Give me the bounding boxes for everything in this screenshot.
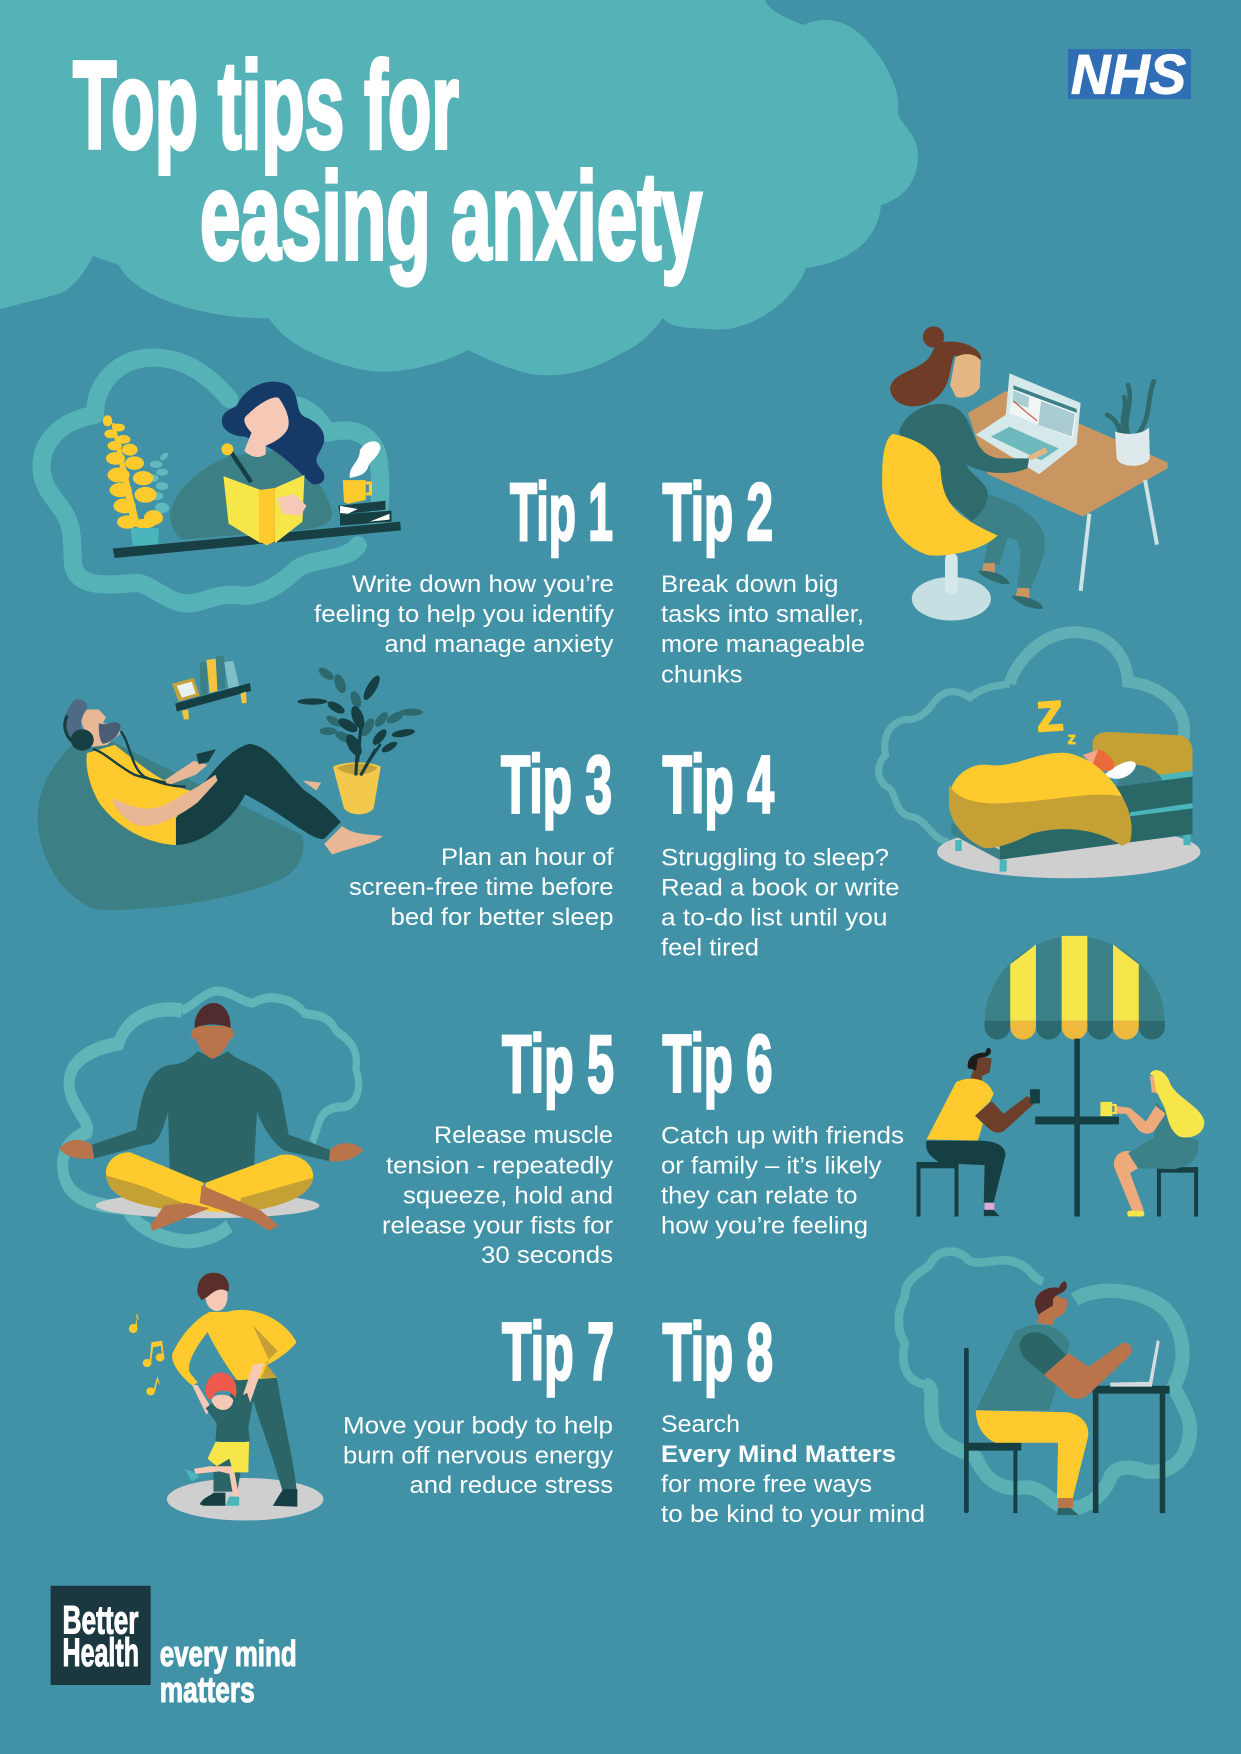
blanket: [949, 753, 1132, 848]
tip 3: screen-free time before: [349, 874, 614, 901]
header cloud: [0, 0, 918, 375]
dad head: [197, 1273, 229, 1311]
dad shirt: [172, 1310, 297, 1385]
tip 4: [661, 740, 900, 962]
illustration: meditation and dancing: [51, 991, 363, 1685]
desk: [968, 391, 1168, 517]
tip 8: Every Mind Matters: [661, 1441, 896, 1468]
pen: [231, 452, 251, 482]
headphones and cable: [65, 715, 214, 787]
dance floor shadow: [167, 1478, 323, 1520]
tip 8: for more free ways: [661, 1471, 872, 1498]
man trousers: [976, 1410, 1088, 1498]
illustration: woman at laptop and sleeping person: [879, 326, 1200, 878]
sleeping Z letters: Z: [1036, 693, 1064, 740]
tip 6: [661, 1018, 904, 1240]
body: [170, 450, 332, 539]
laptop: [976, 373, 1081, 474]
woman hair: [890, 326, 982, 406]
woman right: [1100, 1070, 1204, 1217]
plant pot: [130, 528, 159, 545]
thought cloud outline: [42, 358, 380, 603]
Better Health logo box: [51, 1586, 151, 1685]
tip 1: and manage anxiety: [384, 631, 614, 658]
tip 3: Tip 3: [501, 740, 612, 830]
potted plant: [297, 665, 423, 814]
crossed legs: [106, 1152, 313, 1213]
meditation cloud outline: [63, 991, 359, 1241]
dad trousers and shoes: [200, 1378, 297, 1507]
tip 8: to be kind to your mind: [661, 1501, 925, 1528]
shelf: [113, 522, 401, 558]
beard and hair: [64, 699, 121, 744]
tip 5: tension - repeatedly: [386, 1152, 614, 1180]
Better Health logo text: Health: [62, 1631, 139, 1675]
tip 6: Catch up with friends: [661, 1122, 904, 1150]
sleeping Z letters: [1036, 693, 1076, 748]
man sleeve: [1019, 1332, 1066, 1375]
woman face: [950, 354, 981, 398]
chair base: [912, 553, 991, 621]
tip 5: release your fists for: [382, 1212, 613, 1240]
tip 4: Struggling to sleep?: [661, 844, 889, 872]
desk plant: [1107, 381, 1154, 466]
face: [244, 397, 289, 457]
sleep cloud outline: [879, 632, 1184, 842]
tip 6: Tip 6: [662, 1018, 772, 1110]
tip 3: bed for better sleep: [390, 904, 614, 931]
tip 7: [343, 1306, 614, 1499]
tip 3: Plan an hour of: [441, 844, 614, 871]
tip 1: [314, 467, 615, 658]
tip 8: Search: [661, 1411, 740, 1438]
tip 2: Tip 2: [662, 467, 773, 558]
bed floor shadow: [937, 825, 1200, 878]
tip 2: chunks: [661, 662, 742, 688]
back plant: [146, 451, 170, 513]
illustration: friends at cafe table and man with laptop: [899, 936, 1204, 1515]
tip 6: how you’re feeling: [661, 1212, 868, 1240]
tip 7: and reduce stress: [410, 1472, 613, 1499]
tip 1: Write down how you’re: [352, 571, 614, 598]
tip 7: Tip 7: [502, 1306, 614, 1398]
tip 2: more manageable: [661, 631, 865, 658]
head: [191, 1003, 234, 1059]
tip 4: Tip 4: [662, 740, 774, 830]
title: Top tips for: [73, 37, 459, 175]
wall shelf with books: [172, 655, 251, 719]
tip 2: [661, 467, 865, 688]
tip 5: [382, 1019, 614, 1269]
every mind matters logo text: matters: [160, 1669, 255, 1710]
table: [1035, 1039, 1119, 1217]
title: easing anxiety: [200, 148, 702, 286]
Better Health logo text: Better: [62, 1598, 138, 1642]
tip 5: Release muscle: [434, 1122, 613, 1149]
man head: [1035, 1281, 1067, 1325]
man skin: [81, 709, 383, 855]
umbrella: [985, 936, 1165, 1040]
yellow plant: [103, 415, 163, 529]
tip 3: [349, 740, 614, 931]
chair seat: [882, 434, 998, 556]
tip 6: or family – it’s likely: [661, 1152, 882, 1180]
tip 8: [661, 1307, 925, 1528]
illustration: woman writing in journal: [38, 358, 423, 910]
feet: [978, 563, 1043, 609]
tip 1: Tip 1: [510, 467, 613, 558]
tip 5: 30 seconds: [481, 1242, 613, 1269]
tip 4: a to-do list until you: [661, 904, 888, 932]
tip 4: Read a book or write: [661, 874, 900, 902]
every mind matters logo text: [160, 1633, 297, 1710]
tip 2: Break down big: [661, 571, 838, 598]
tip 5: Tip 5: [502, 1019, 614, 1110]
trousers: [968, 494, 1045, 589]
man shirt: [86, 745, 190, 845]
feet: [150, 1185, 279, 1231]
desk and laptop: [1093, 1340, 1170, 1513]
tip 7: burn off nervous energy: [343, 1442, 614, 1470]
open book: [223, 475, 306, 545]
jumper: [899, 404, 1029, 522]
torso: [92, 1051, 330, 1183]
man on beanbag: beanbag: [38, 731, 303, 910]
every mind matters logo text: every mind: [160, 1633, 297, 1674]
music notes: [129, 1313, 164, 1395]
tip 8: Tip 8: [662, 1307, 773, 1398]
stools: [917, 1162, 1198, 1217]
tip 4: feel tired: [661, 934, 759, 962]
man foot: [1057, 1498, 1079, 1515]
chair: [964, 1348, 1021, 1513]
sleeping Z letters: z: [1068, 729, 1076, 748]
hand: [1027, 447, 1048, 460]
man trousers: [176, 744, 341, 845]
man left: [926, 1048, 1040, 1216]
tip 5: squeeze, hold and: [403, 1182, 613, 1210]
bed: [951, 732, 1193, 872]
desk legs: [1081, 480, 1157, 591]
tip 2: tasks into smaller,: [661, 601, 864, 628]
title: [73, 37, 702, 286]
child: [185, 1363, 264, 1506]
tip 6: they can relate to: [661, 1182, 858, 1210]
laptop cloud outline: [899, 1252, 1190, 1508]
man arm: [1044, 1343, 1132, 1399]
floor shadow: [96, 1193, 319, 1218]
Better Health logo text: [62, 1598, 139, 1675]
hands: [59, 1140, 363, 1161]
NHS logo: NHS: [1071, 42, 1186, 106]
stacked books and mug: [338, 441, 391, 526]
man torso: [976, 1325, 1070, 1410]
tip 1: feeling to help you identify: [314, 601, 615, 628]
hair: [222, 382, 324, 484]
tip 7: Move your body to help: [343, 1412, 613, 1440]
